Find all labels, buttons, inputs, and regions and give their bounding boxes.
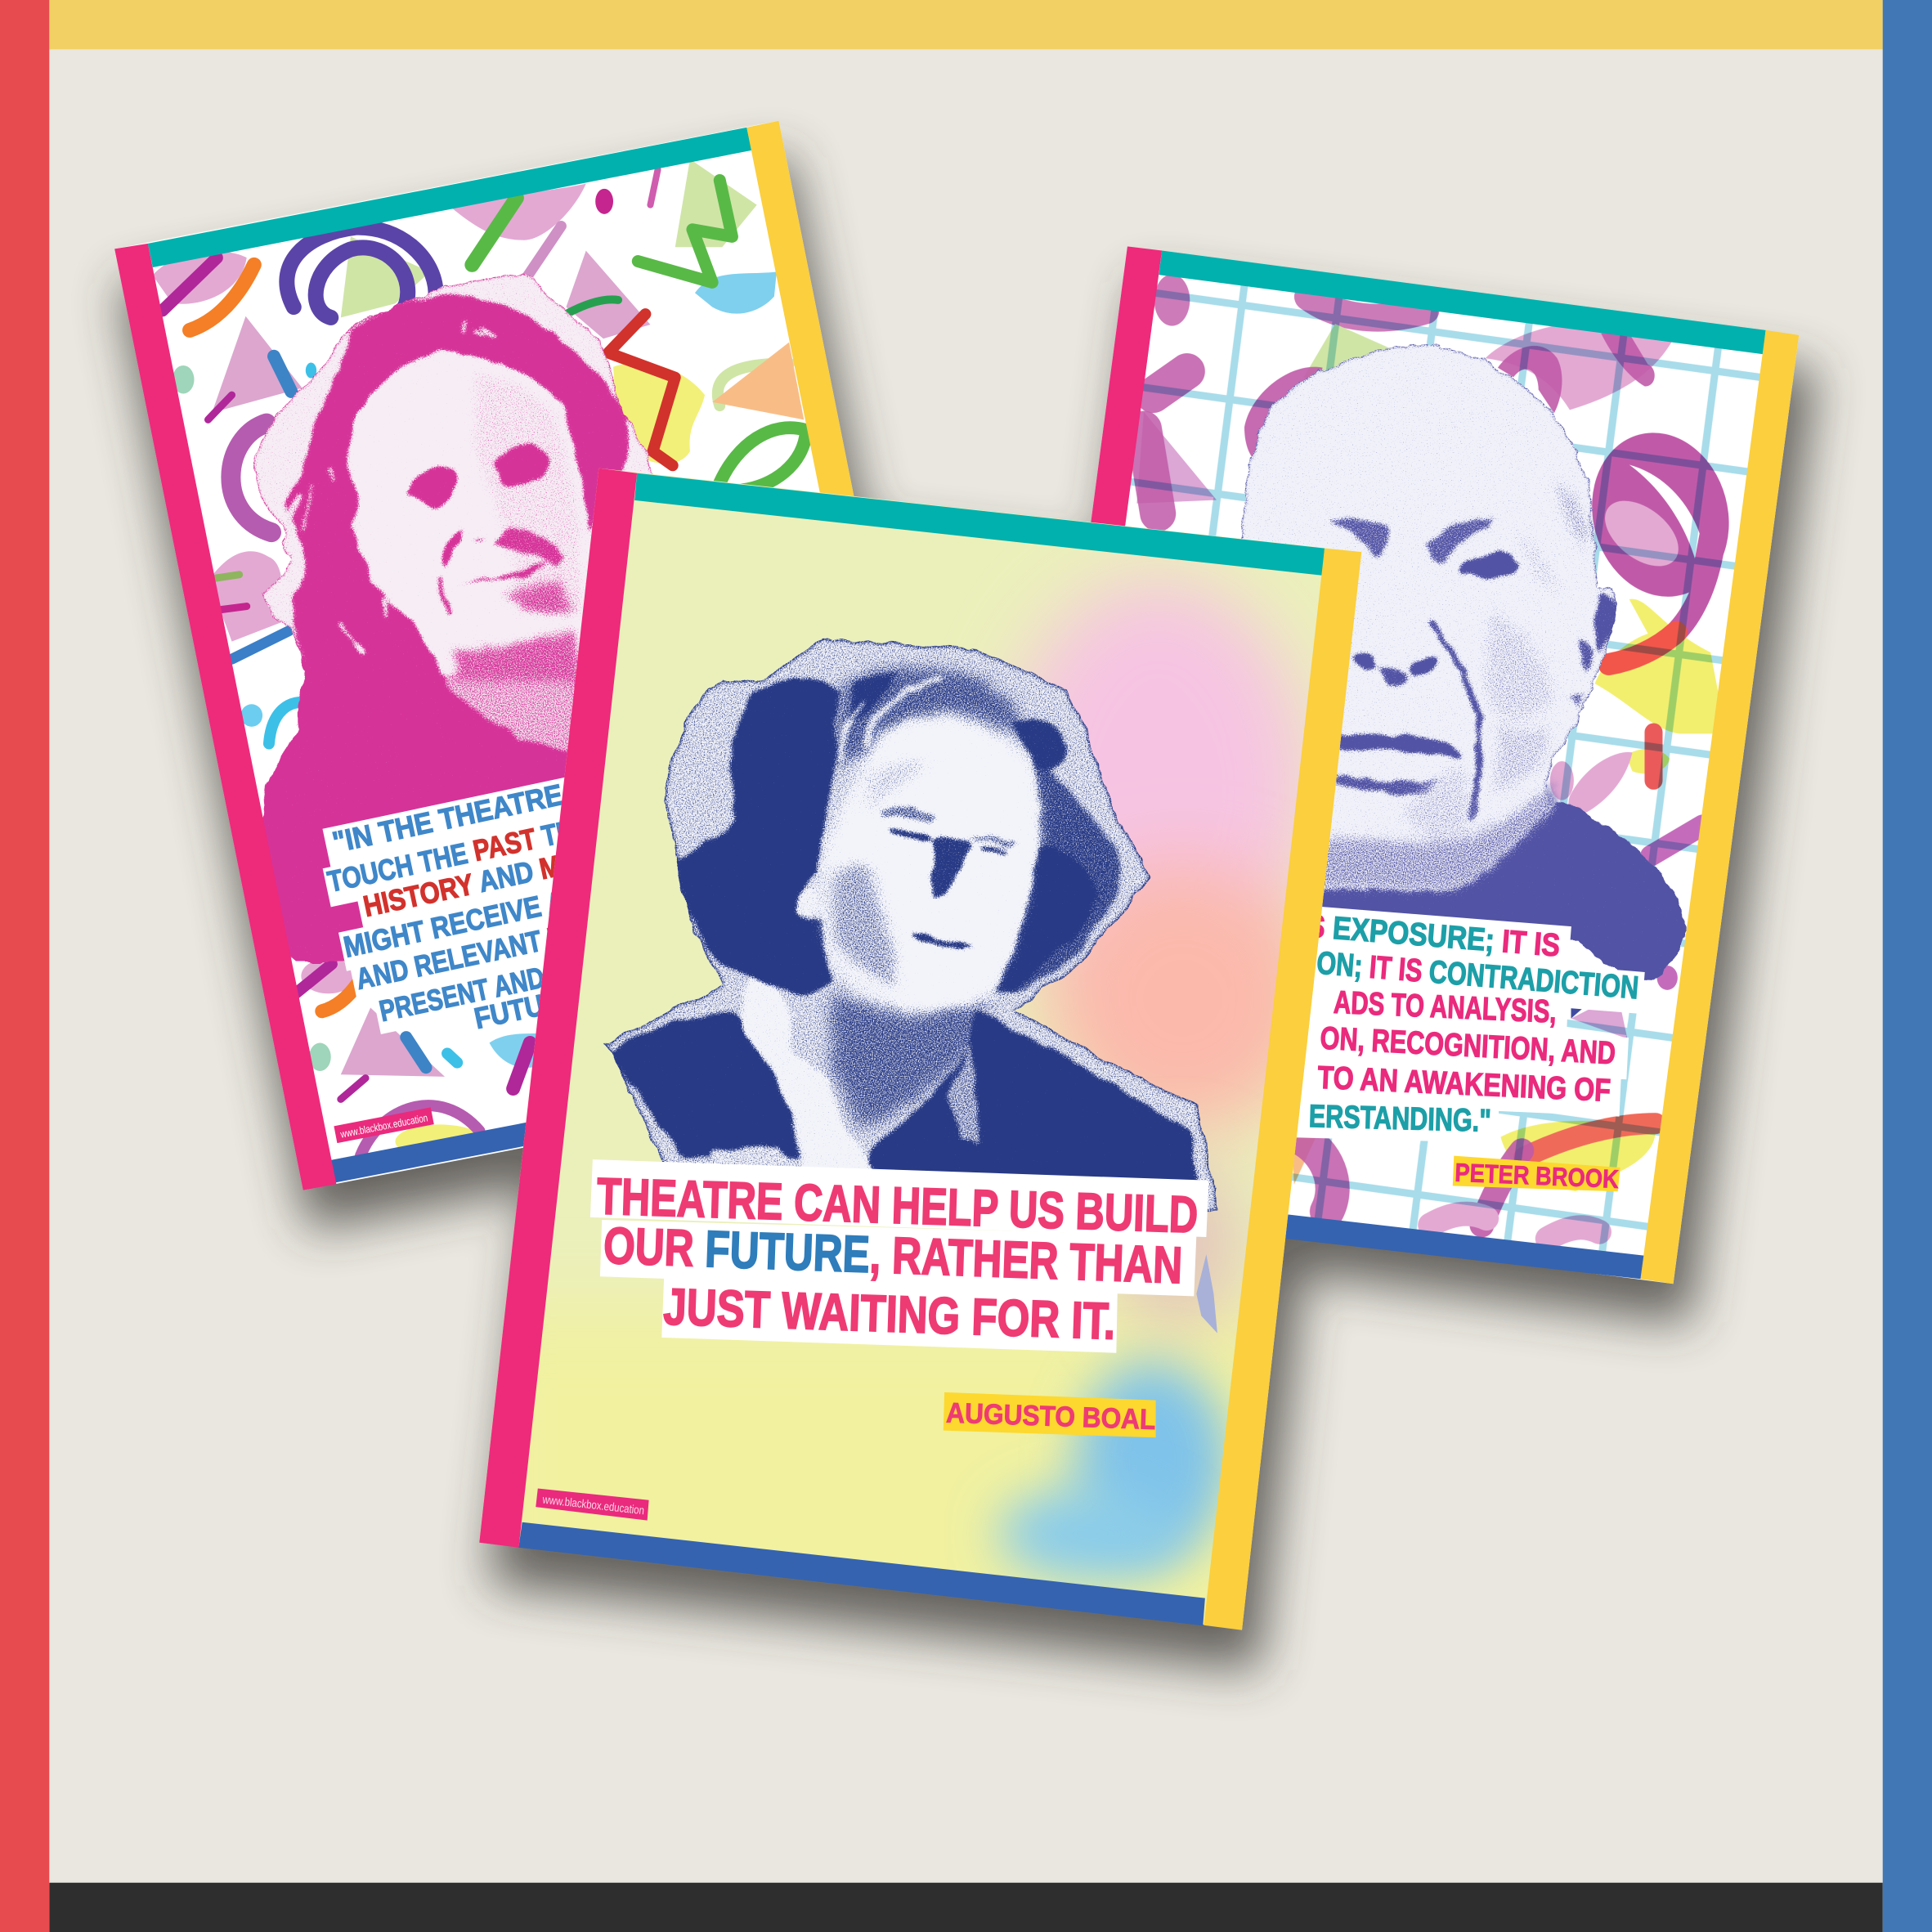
poster border bars: [114, 121, 967, 1190]
poster paper: [1002, 246, 1799, 1284]
headline quote: [590, 1159, 1208, 1353]
poster drop shadows: [119, 155, 1816, 1671]
quote text block: ON; IT IS CONTRADICTION: [1316, 946, 1640, 1006]
portrait: man with curly hair in navy halftone: [603, 639, 1219, 1212]
frame bar: bottom dark: [49, 1883, 1883, 1932]
website tag: [536, 1488, 649, 1521]
headline quote: JUST WAITING FOR IT.: [662, 1278, 1116, 1351]
headline quote: OUR FUTURE, RATHER THAN: [603, 1217, 1183, 1294]
quote text block: TO AN AWAKENING OF: [1317, 1060, 1611, 1109]
poster border bars: [479, 468, 1361, 1630]
website tag: www.blackbox.education: [338, 1111, 428, 1141]
quote text block: "IN THE THEATRE, W: [329, 769, 606, 859]
grid and shape pattern: [1109, 276, 1794, 1275]
poster: right, violet portrait: [1002, 191, 1811, 1346]
quote text block: PRESENT AND: [376, 960, 547, 1028]
poster paper: [114, 121, 967, 1190]
quote text block: TOUCH THE PAST TH: [325, 814, 577, 899]
frame bar: left red: [0, 0, 49, 1932]
poster: left, pink portrait: [114, 121, 854, 1190]
quote text block: AND RELEVANT H: [353, 919, 568, 996]
portrait: elderly man in violet halftone: [1226, 345, 1684, 981]
quote text block: MIGHT RECEIVE A: [341, 884, 568, 964]
headline quote: THEATRE CAN HELP US BUILD: [596, 1168, 1199, 1244]
quote text block: ADS TO ANALYSIS,: [1333, 985, 1558, 1030]
gradient paper: [468, 456, 1380, 1676]
frame bar: top yellow: [49, 0, 1883, 49]
doodle pattern: [153, 159, 806, 1159]
quote text block: ON, RECOGNITION, AND: [1320, 1021, 1616, 1071]
frame bar: right blue: [1883, 0, 1932, 1932]
quote text block: FUTU: [471, 988, 547, 1035]
portrait: woman with long hair in magenta halftone: [253, 274, 673, 962]
torn paper sliver: [1196, 1254, 1217, 1334]
quote text block: ERSTANDING.": [1308, 1099, 1491, 1139]
quote text block: [1268, 903, 1645, 1143]
quote text block: S EXPOSURE; IT IS: [1306, 908, 1562, 964]
quote text block: [322, 766, 621, 1039]
poster border bars: [1002, 246, 1799, 1284]
website tag: www.blackbox.education: [541, 1494, 645, 1517]
attribution: Peter Brook: PETER BROOK: [1455, 1158, 1620, 1194]
quote text block: HISTORY AND MY: [361, 845, 580, 923]
poster: front, Augusto Boal: [468, 456, 1380, 1676]
attribution: Augusto Boal: AUGUSTO BOAL: [946, 1398, 1156, 1436]
